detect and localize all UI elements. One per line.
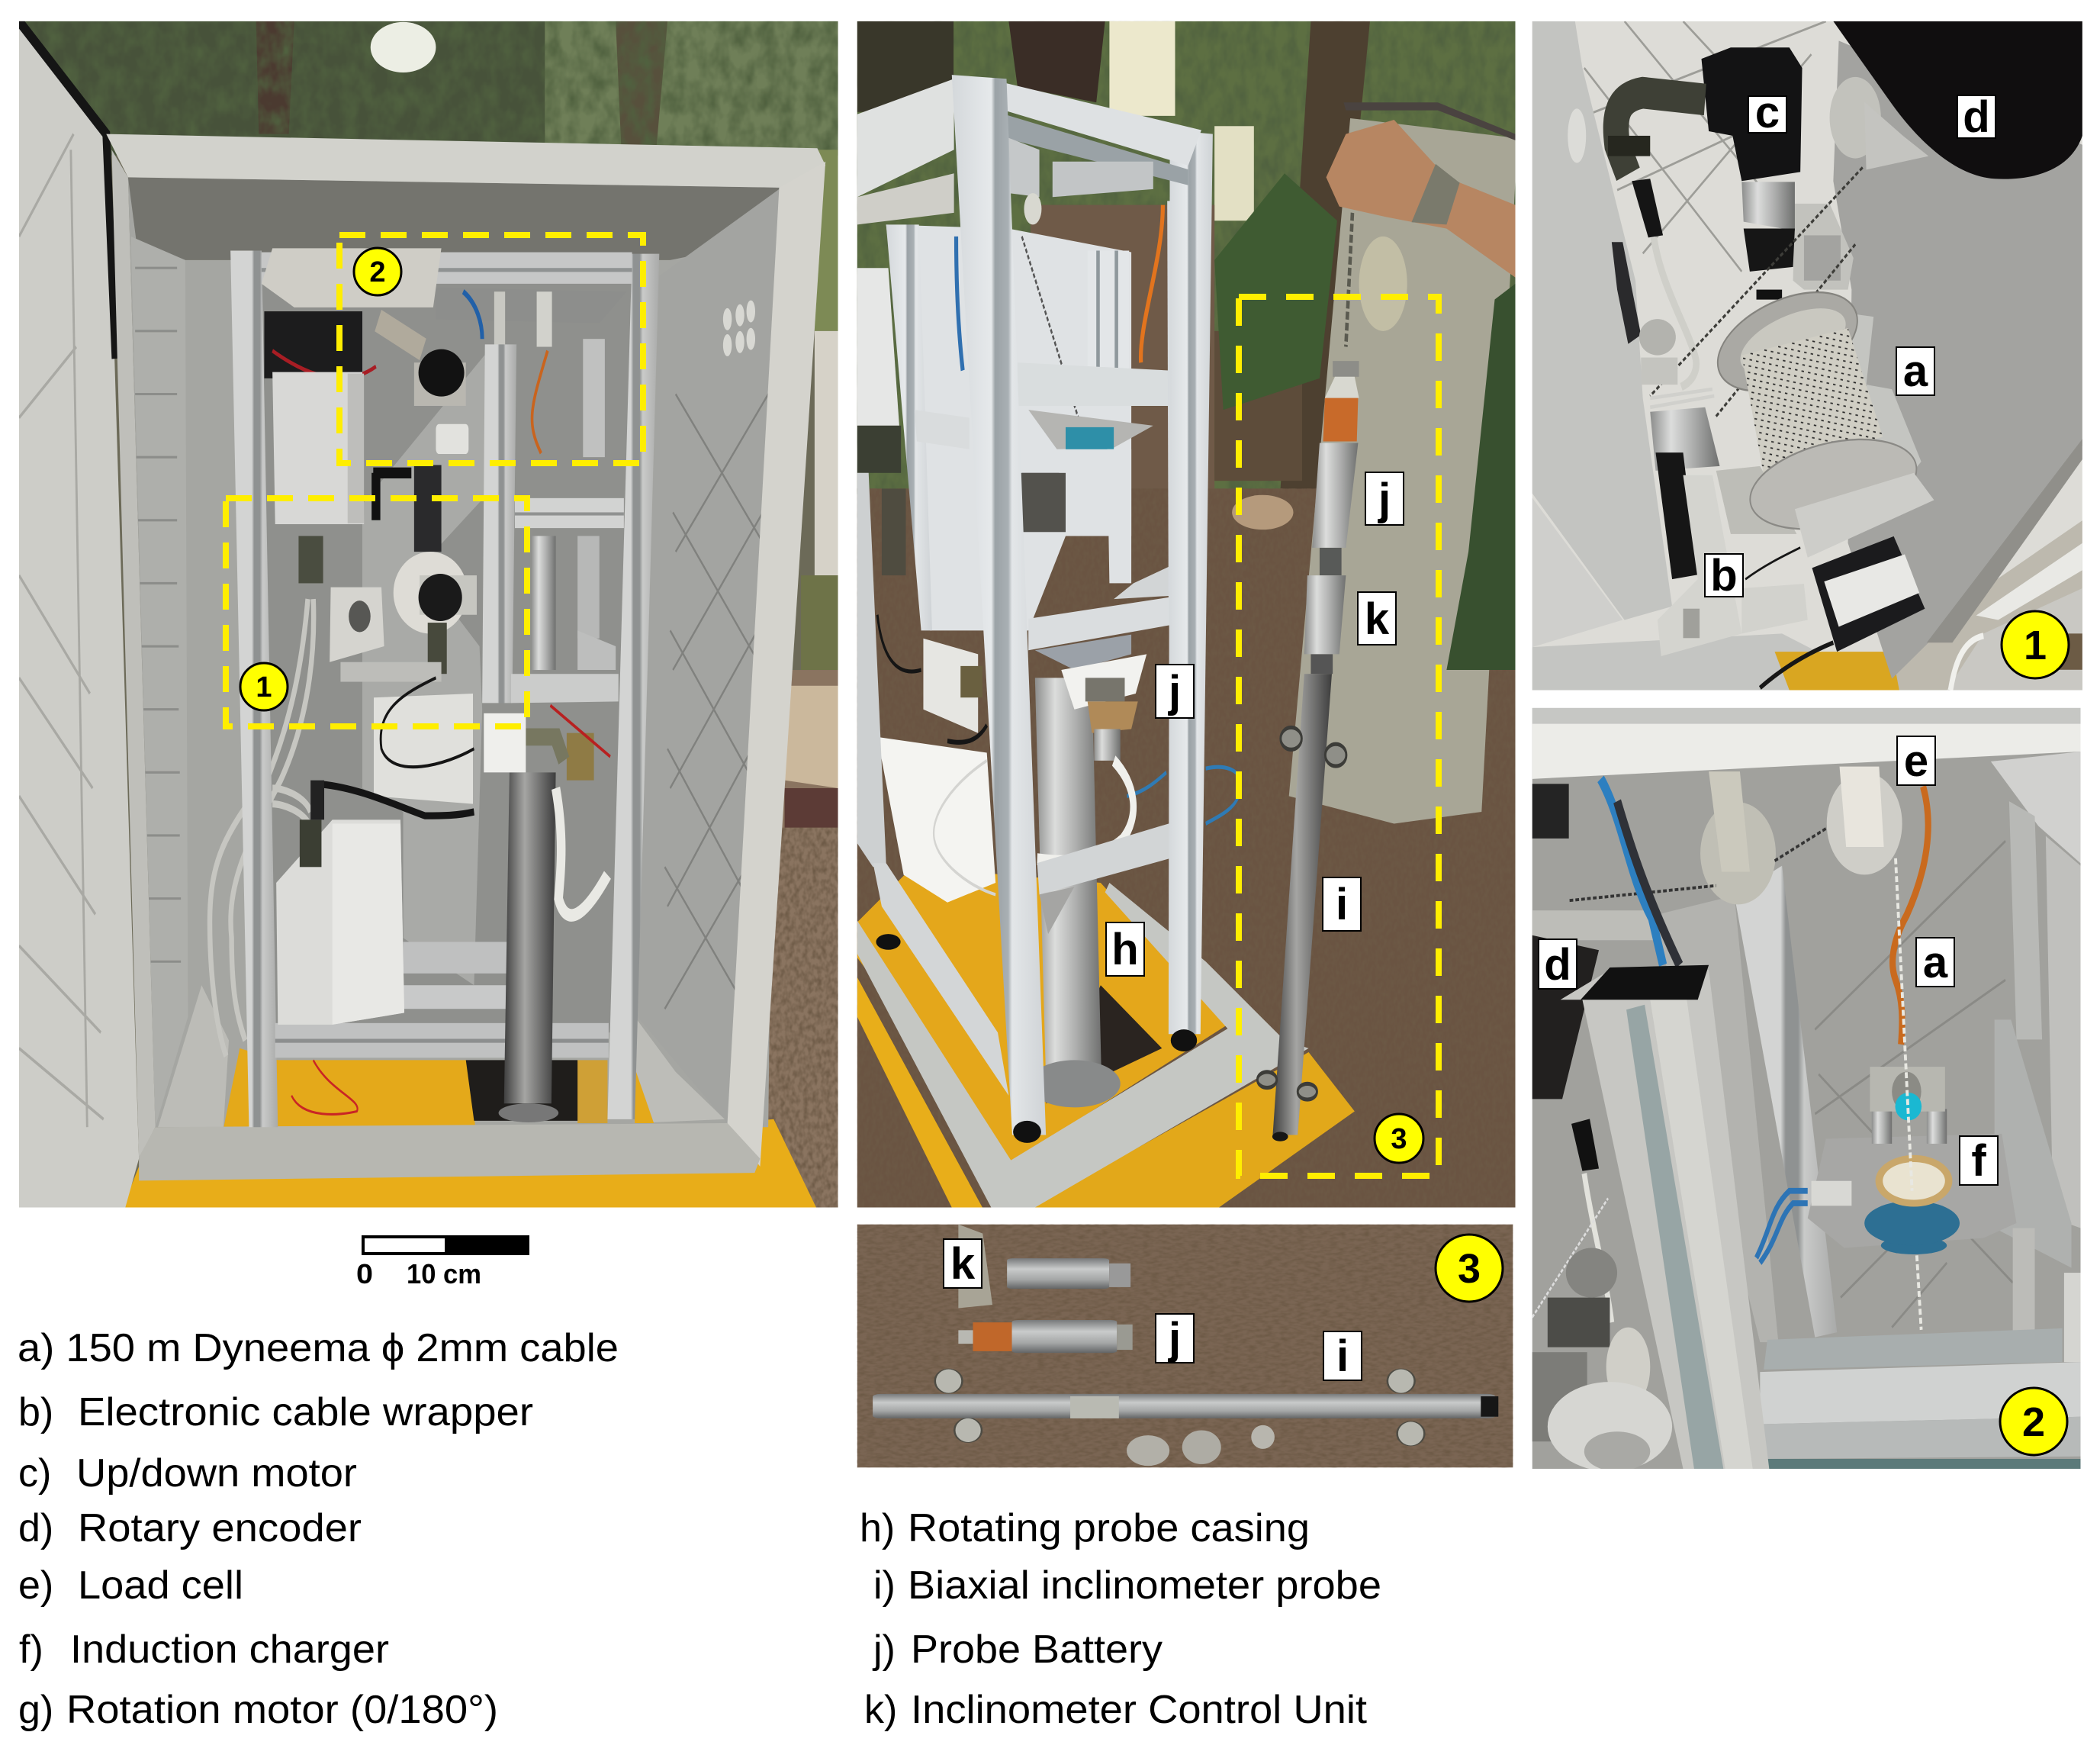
label c: c <box>1755 88 1780 137</box>
inner verticals <box>482 344 516 703</box>
label i <box>1323 877 1361 931</box>
label j <box>1156 1314 1194 1363</box>
grey plate <box>1833 40 2082 679</box>
yellow base <box>123 1119 816 1208</box>
bracket <box>1793 204 1854 290</box>
callout circle 2 <box>2000 1388 2067 1455</box>
interior plate <box>886 224 1131 630</box>
callout circle 3 <box>1375 1114 1423 1163</box>
legend item b: Electronic cable wrapper <box>78 1390 533 1434</box>
label d <box>1539 939 1577 990</box>
label f <box>1960 1136 1998 1186</box>
label a: a <box>1923 938 1948 987</box>
white junction boxes <box>374 694 473 804</box>
callout circle 2: 2 <box>2022 1399 2045 1445</box>
plate and coil <box>1808 1134 2016 1248</box>
columns <box>1169 130 1213 1034</box>
label d: d <box>1963 92 1990 142</box>
callout circle 1: 1 <box>2024 623 2047 668</box>
door <box>19 21 139 1208</box>
box frame <box>106 134 825 189</box>
scale bar: 0 <box>356 1258 373 1289</box>
label k: k <box>950 1239 976 1289</box>
panel: enclosure photo <box>19 21 838 1208</box>
bottom aluminium <box>1764 1328 2062 1370</box>
label a <box>1916 938 1954 987</box>
label k: k <box>1365 594 1390 644</box>
concrete post <box>1289 118 1515 823</box>
callout circle 1: 1 <box>256 671 272 703</box>
floor <box>857 867 1227 1163</box>
right columns <box>2009 801 2042 1039</box>
lower left mechanics <box>1584 1174 1612 1322</box>
legend: right column <box>860 1506 1381 1732</box>
pipe <box>504 772 556 1103</box>
panel: frame and probe photo <box>857 21 1515 1208</box>
wiring left <box>210 599 314 1056</box>
scale bar <box>356 1235 529 1289</box>
label d: d <box>1544 940 1571 990</box>
rope <box>1896 858 1922 1330</box>
white cover <box>877 737 995 903</box>
label f: f <box>1971 1136 1986 1186</box>
legend item k: k) <box>864 1688 897 1732</box>
photo: spool, motor and encoder <box>1532 21 2082 690</box>
legend item i: Biaxial inclinometer probe <box>908 1563 1381 1608</box>
encoder d black <box>1833 21 2082 179</box>
legend item j: j) <box>872 1627 896 1672</box>
gear <box>1061 654 1146 710</box>
label h: h <box>1111 925 1139 974</box>
dark floor opening <box>224 1048 475 1128</box>
label h <box>1106 922 1144 976</box>
label a: a <box>1903 346 1928 396</box>
callout circle 2: 2 <box>369 256 386 288</box>
label i <box>1323 1331 1362 1381</box>
spool and encoder <box>394 552 468 634</box>
panel: probe parts photo <box>857 1225 1513 1467</box>
dashed outline: detail 3 <box>1239 297 1439 1176</box>
legend item d: Rotary encoder <box>78 1506 362 1550</box>
upper dark devices <box>264 311 362 378</box>
legend item f: f) <box>19 1627 43 1672</box>
pulleys <box>1700 802 1776 904</box>
callout circle 3 <box>1436 1235 1503 1302</box>
legend item h: Rotating probe casing <box>908 1506 1310 1550</box>
encoder mount and encoder <box>1795 473 1934 558</box>
legend item h: h) <box>860 1506 895 1550</box>
hand <box>1327 120 1515 278</box>
label b: b <box>1710 551 1738 600</box>
scale bar: 10 cm <box>407 1258 481 1289</box>
screw <box>1639 319 1676 356</box>
blue hose <box>1127 767 1241 823</box>
legend item j: Probe Battery <box>911 1627 1163 1672</box>
label j on gear <box>1156 665 1194 718</box>
label i: i <box>1336 880 1348 929</box>
legend: left column <box>18 1326 619 1732</box>
photo: load cell and induction charger <box>1532 708 2081 1471</box>
panel: detail 1 photo <box>1532 21 2082 690</box>
main columns <box>230 250 278 1127</box>
blue cables <box>1600 779 1663 965</box>
spool <box>1708 273 1867 410</box>
legend item g: g) <box>18 1688 53 1732</box>
legend item e: Load cell <box>78 1563 243 1608</box>
callout circle 1 <box>2002 611 2069 678</box>
orange cable <box>1893 787 1928 1045</box>
legend item e: e) <box>18 1563 53 1608</box>
label a <box>1896 346 1934 396</box>
dashed outline: detail 1 <box>226 498 527 726</box>
k module <box>1007 1258 1109 1289</box>
label j: j <box>1378 475 1391 524</box>
photo: probe parts on ground <box>857 1225 1513 1467</box>
label j on gear: j <box>1168 667 1181 716</box>
photo: open instrument enclosure <box>19 21 838 1208</box>
cable line <box>1650 167 1863 417</box>
dashed outline: detail 2 <box>339 235 643 463</box>
callout circle 1 <box>240 663 288 710</box>
legend item a: a) 150 m Dyneema ϕ 2mm cable <box>18 1326 619 1370</box>
legend item i: i) <box>873 1563 896 1608</box>
legend item f: Induction charger <box>70 1627 389 1672</box>
probe rod <box>935 1369 1424 1446</box>
white control box <box>272 372 364 524</box>
legend item c: Up/down motor <box>76 1451 357 1495</box>
legend item k: Inclinometer Control Unit <box>911 1688 1368 1732</box>
pipe casing <box>1035 678 1101 1080</box>
label j: j <box>1168 1314 1181 1363</box>
foreground column <box>1561 970 1769 1469</box>
label j <box>1365 472 1404 525</box>
connector <box>1616 93 1705 174</box>
legend item c: c) <box>18 1451 51 1495</box>
motor c <box>1701 47 1803 181</box>
label e: e <box>1904 736 1928 786</box>
interior <box>128 177 779 1127</box>
callout circle 2 <box>354 248 401 295</box>
label c <box>1748 88 1786 137</box>
label k <box>944 1239 982 1289</box>
j module <box>1012 1320 1117 1353</box>
callout circle 3: 3 <box>1458 1246 1481 1292</box>
legend item g: Rotation motor (0/180°) <box>66 1688 498 1732</box>
legend item b: b) <box>18 1390 53 1434</box>
legend item d: d) <box>18 1506 53 1550</box>
label k <box>1358 592 1396 645</box>
panel: detail 2 photo <box>1532 708 2081 1471</box>
callout circle 3: 3 <box>1391 1123 1407 1155</box>
label i: i <box>1336 1331 1349 1381</box>
label e <box>1897 736 1935 786</box>
photo: frame and hanging probe <box>857 21 1515 1208</box>
sensor block <box>1872 1109 1892 1144</box>
probe <box>1346 213 1352 347</box>
